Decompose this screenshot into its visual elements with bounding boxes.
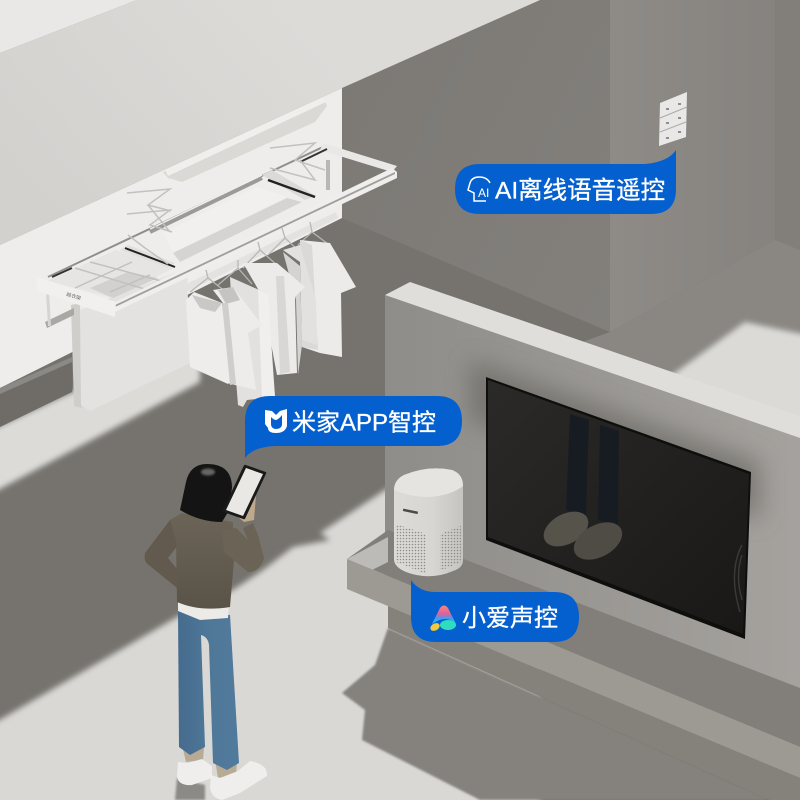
tv reflection: legs (538, 414, 628, 567)
left arm (145, 520, 182, 588)
collar shade (218, 287, 240, 304)
back rail (48, 146, 325, 277)
ledge front (347, 559, 800, 778)
ceiling beam (0, 0, 137, 53)
end cap (37, 277, 116, 317)
recess (0, 357, 72, 427)
icon: Xiao Ai (429, 606, 456, 633)
tv (486, 377, 751, 639)
speaker (394, 468, 463, 576)
socks (182, 745, 204, 762)
clothes rack (37, 97, 397, 411)
tee 4 (243, 263, 305, 375)
clip strip (178, 212, 338, 294)
tee 6 (300, 240, 356, 357)
floor shadow under ledge (342, 628, 770, 800)
tv reflection: arcs (734, 545, 742, 612)
bubble: AI offline voice remote (455, 150, 676, 214)
shoe shadow (175, 778, 205, 800)
center grey panel (173, 198, 302, 262)
right section frame (320, 143, 397, 172)
hem (178, 600, 229, 620)
bubble text: AI离线语音遥控 (495, 176, 665, 204)
ledge (342, 530, 800, 800)
clothes (186, 222, 356, 407)
shoes (177, 759, 212, 785)
ledge top (347, 530, 800, 747)
ceiling (0, 0, 540, 245)
clothes rack: 晾衣架 (65, 291, 82, 302)
right floor (560, 240, 800, 440)
bubble text: 小爱声控 (462, 605, 558, 632)
wall top (385, 282, 800, 438)
hand (232, 495, 256, 522)
jeans (178, 610, 239, 770)
ceiling rail (163, 98, 327, 182)
hair (180, 464, 232, 522)
soffit band (0, 88, 342, 388)
front rail (115, 168, 397, 312)
phone (224, 466, 265, 518)
switch panel (659, 92, 687, 146)
bubble text: 米家APP智控 (292, 410, 436, 436)
dark slots (125, 248, 175, 267)
right arm (222, 523, 264, 572)
tv partition wall (385, 282, 800, 760)
tee 3 (230, 277, 275, 407)
pole (71, 303, 82, 408)
vertical post (326, 160, 330, 190)
tank 5 (283, 245, 317, 345)
left section (47, 250, 176, 298)
right floor light patch (668, 322, 800, 440)
center tube (150, 178, 262, 232)
speaker grill (396, 524, 461, 574)
icon: AI head: AI (478, 186, 489, 200)
icon: AI head (468, 177, 490, 201)
racks lattice (75, 143, 325, 292)
back wall (342, 0, 780, 332)
floor lit area (0, 470, 540, 800)
center white panel (163, 187, 287, 252)
far right wall (775, 0, 800, 250)
right wall (610, 0, 775, 332)
bubble: Mi Home app (245, 396, 462, 458)
tee 2 (213, 287, 262, 390)
torso (170, 513, 234, 609)
hangers (190, 222, 328, 292)
tank 1 (186, 292, 231, 384)
wall front (385, 295, 800, 760)
person (145, 464, 267, 800)
floor lit band (0, 345, 200, 505)
icon: Mi Home (265, 409, 287, 433)
ledge underside (388, 606, 800, 800)
bubble: Xiao Ai voice (411, 580, 579, 642)
hanging panel (80, 268, 190, 411)
wall shadow above tv (470, 360, 760, 520)
